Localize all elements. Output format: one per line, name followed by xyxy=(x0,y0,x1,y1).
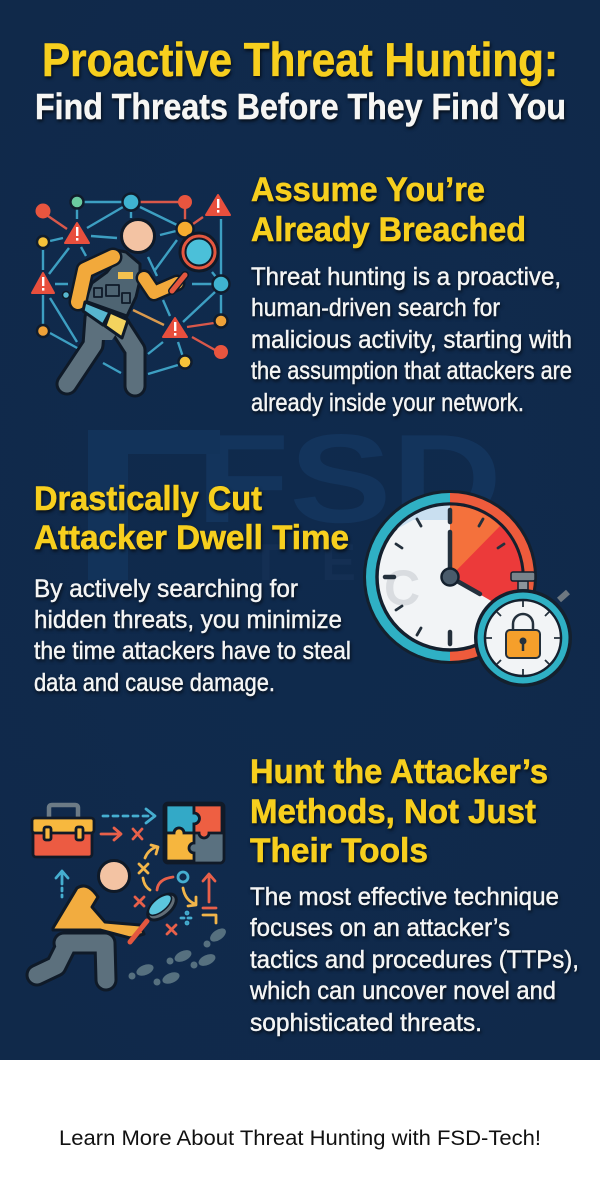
footer panel xyxy=(0,1060,600,1200)
hunter figure xyxy=(62,220,218,386)
network links xyxy=(43,202,221,374)
watermark: FSD Tech logo: FSD xyxy=(196,408,502,549)
heading: attacker methods xyxy=(250,753,548,870)
magnifier xyxy=(130,921,147,942)
heading: dwell time xyxy=(34,480,349,557)
title xyxy=(35,33,566,127)
text block: dwell time body: hidden threats, you minimize xyxy=(34,606,342,634)
footprints xyxy=(128,926,228,986)
title: Proactive Threat Hunting: xyxy=(42,33,558,86)
network nodes xyxy=(36,194,230,368)
torso vest xyxy=(85,250,140,316)
text block: assume breached body: malicious activity, starting with xyxy=(251,326,572,354)
text block: dwell time body: data and cause damage. xyxy=(34,669,275,697)
analyst figure xyxy=(37,860,181,980)
legs xyxy=(67,318,135,386)
panel: dwell time text xyxy=(34,480,351,697)
text block: attacker methods body: sophisticated threats. xyxy=(250,1009,482,1037)
tactic arrows and marks xyxy=(56,809,216,934)
icon: clock and stopwatch lock xyxy=(363,490,572,687)
heading: assume breached xyxy=(251,171,526,249)
text block: attacker methods body: tactics and procedures (TTPs), xyxy=(250,946,579,974)
icon: analyst with tools, puzzle and footprints xyxy=(32,803,228,986)
text block: assume breached body: already inside your network. xyxy=(251,389,524,417)
text block: attacker methods body: which can uncover novel and xyxy=(249,977,556,1005)
puzzle xyxy=(164,803,224,863)
heading: dwell time: Drastically Cut xyxy=(34,480,262,518)
clock: C xyxy=(384,560,420,616)
heading: assume breached: Assume You’re xyxy=(251,171,485,209)
text block: assume breached body xyxy=(251,263,572,417)
panel: attacker methods text xyxy=(249,753,579,1037)
text block: assume breached body: human-driven search for xyxy=(251,294,500,322)
heading: assume breached: Already Breached xyxy=(251,211,526,249)
toolbox xyxy=(32,805,94,857)
text block: dwell time body: the time attackers have to steal xyxy=(34,637,351,665)
heading: attacker methods: Hunt the Attacker’s xyxy=(250,753,548,791)
clock xyxy=(363,490,537,664)
footer call to action: Learn More About Threat Hunting with FSD-Tech! xyxy=(59,1127,541,1150)
kneeling legs xyxy=(37,943,106,980)
torso and arm xyxy=(53,886,144,938)
text block: dwell time body xyxy=(34,575,351,697)
text block: attacker methods body: The most effective technique xyxy=(250,883,559,911)
watermark: FSD Tech logo xyxy=(88,408,510,592)
heading: attacker methods: Methods, Not Just xyxy=(250,793,536,831)
text block: dwell time body: By actively searching for xyxy=(34,575,298,603)
text block: attacker methods body: focuses on an attacker’s xyxy=(250,914,510,942)
icon: hunter in threat network xyxy=(32,194,230,386)
belt and bib xyxy=(105,312,128,338)
heading: attacker methods: Their Tools xyxy=(250,832,428,870)
watermark: FSD Tech logo: TECH xyxy=(250,534,510,592)
alert triangles xyxy=(32,195,230,337)
heading: dwell time: Attacker Dwell Time xyxy=(34,519,349,557)
stopwatch with padlock xyxy=(474,572,572,687)
text block: attacker methods body xyxy=(249,883,579,1037)
magnifier xyxy=(172,275,185,291)
panel: assume breached text xyxy=(251,171,572,417)
left arm xyxy=(78,257,177,302)
text block: assume breached body: Threat hunting is a proactive, xyxy=(251,263,561,291)
